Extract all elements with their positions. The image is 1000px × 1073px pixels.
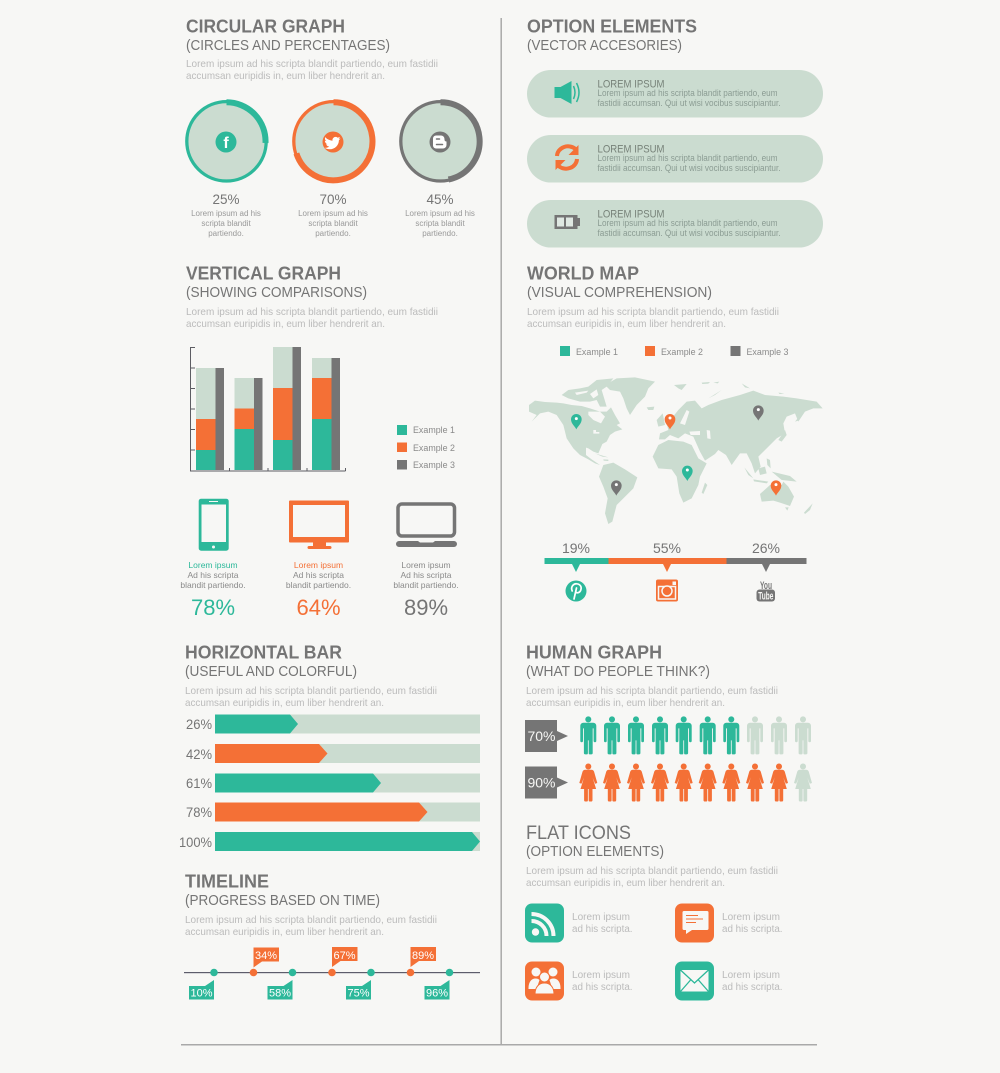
stat: laptop 89%: blandit partiendo. (393, 580, 459, 590)
split percentage bar: 19% (562, 540, 590, 556)
stat: phone 78%: blandit partiendo. (180, 580, 246, 590)
icon: laptop (396, 504, 457, 547)
icon: speaker (554, 81, 579, 104)
map legend (560, 346, 788, 358)
icon: youtube: You (760, 580, 772, 592)
heading: flat icons: accumsan euripidis in, eum liber hendrerit an. (526, 877, 725, 889)
pictogram row: men (580, 716, 811, 754)
pictogram row: women (579, 764, 812, 802)
circle gauge: 70% (294, 102, 373, 238)
text: chat (722, 912, 782, 935)
heading: world map (527, 262, 779, 330)
heading: timeline: (PROGRESS BASED ON TIME) (185, 893, 380, 909)
icon: youtube: Tube (758, 590, 773, 602)
heading: vertical graph: (SHOWING COMPARISONS) (186, 285, 367, 301)
circle gauge: 25% (187, 102, 266, 238)
text: group: Lorem ipsum (572, 970, 630, 981)
heading: flat icons (526, 822, 778, 889)
option pill: refresh: fastidii accumsan. Qui ut wisi vocibus suscipiantur. (598, 163, 780, 173)
option pill: battery: Lorem ipsum ad his scripta blandit partiendo, eum (598, 218, 778, 228)
text: rss (572, 912, 632, 935)
callout: 70% (525, 720, 568, 752)
circle gauge: 45%: 45% (426, 192, 454, 207)
circle gauge: 70%: 70% (319, 192, 347, 207)
stat: monitor 64%: Lorem ipsum (294, 560, 343, 570)
circle gauge: 45%: scripta blandit (415, 219, 465, 228)
icon: twitter (324, 137, 340, 149)
circle gauge: 45%: Lorem ipsum ad his (405, 209, 475, 218)
timeline events (189, 969, 453, 1000)
icon: rss (525, 904, 564, 942)
text: group (572, 970, 632, 993)
icon: battery (554, 215, 580, 229)
panel: human graph (525, 642, 812, 802)
map legend: Example 2 (661, 347, 703, 358)
bar: 26% (186, 714, 480, 734)
bar: 61% (186, 774, 480, 792)
heading: vertical graph: VERTICAL GRAPH (186, 262, 341, 284)
option pill: battery (527, 200, 823, 248)
circle gauge: 45%: partiendo. (422, 229, 458, 238)
text: rss: Lorem ipsum (572, 912, 630, 923)
callout: 90% (525, 766, 568, 798)
heading: world map: Lorem ipsum ad his scripta blandit partiendo, eum fastidii (527, 306, 779, 318)
circle gauge: 25%: partiendo. (208, 229, 244, 238)
text: envelope: Lorem ipsum (722, 970, 780, 981)
option pill: refresh: Lorem ipsum ad his scripta blandit partiendo, eum (598, 153, 778, 163)
stat: monitor 64%: 64% (296, 595, 341, 620)
heading: human graph (526, 642, 778, 709)
bar: 61%: 61% (186, 775, 212, 791)
option pill: sound: fastidii accumsan. Qui ut wisi vocibus suscipiantur. (598, 98, 780, 108)
split percentage bar: 55% (653, 540, 681, 556)
heading: flat icons: (OPTION ELEMENTS) (526, 844, 664, 860)
bar: 78% (186, 802, 480, 822)
option pill: sound: Lorem ipsum ad his scripta blandit partiendo, eum (598, 88, 778, 98)
option pill: battery: fastidii accumsan. Qui ut wisi vocibus suscipiantur. (598, 228, 780, 238)
heading: horizontal bar: (USEFUL AND COLORFUL) (185, 664, 357, 680)
callout: 70%: 70% (527, 728, 556, 744)
text: envelope (722, 970, 782, 993)
icon: instagram (656, 580, 678, 602)
map legend: Example 1 (576, 347, 618, 358)
stat: monitor 64%: Ad his scripta (293, 570, 344, 580)
stat: laptop 89%: Lorem ipsum (401, 560, 451, 570)
heading: world map: WORLD MAP (527, 262, 639, 284)
stat: phone 78%: Lorem ipsum (188, 560, 238, 570)
icon: envelope (675, 962, 714, 1000)
bar: 100%: 100% (179, 834, 212, 850)
stat: phone 78%: 78% (191, 595, 235, 620)
heading: human graph: Lorem ipsum ad his scripta blandit partiendo, eum fastidii (526, 685, 778, 697)
panel: circular graph (186, 16, 480, 238)
circle gauge: 25%: 25% (212, 192, 240, 207)
icon: refresh arrows (556, 145, 578, 170)
heading: timeline (185, 870, 437, 938)
heading: timeline: accumsan euripidis in, eum liber hendrerit an. (185, 926, 384, 938)
icon: chat bubble (675, 904, 714, 942)
heading: world map: accumsan euripidis in, eum liber hendrerit an. (527, 318, 726, 330)
panel: world map (527, 262, 823, 602)
split percentage bar (544, 540, 806, 572)
bar: 42%: 42% (186, 746, 212, 762)
heading: circular graph: Lorem ipsum ad his scripta blandit partiendo, eum fastidii (186, 58, 438, 70)
stat: laptop 89%: Ad his scripta (400, 570, 452, 580)
option pill: sound (527, 70, 823, 118)
heading: vertical graph: accumsan euripidis in, eum liber hendrerit an. (186, 318, 385, 330)
bar: 42% (186, 744, 480, 763)
stat: monitor 64%: blandit partiendo. (286, 580, 351, 590)
legend: Example 1 (413, 425, 455, 436)
option pill: refresh: LOREM IPSUM (598, 144, 665, 156)
bar: 26%: 26% (186, 716, 212, 732)
heading: timeline: Lorem ipsum ad his scripta blandit partiendo, eum fastidii (185, 914, 437, 926)
circle gauge: 70%: scripta blandit (308, 219, 358, 228)
timeline line: 75% (347, 988, 370, 1000)
stat: phone 78% (180, 499, 246, 620)
stacked bar chart (190, 347, 346, 471)
stat: laptop 89%: 89% (404, 595, 448, 620)
heading: world map: (VISUAL COMPREHENSION) (527, 285, 712, 301)
text: rss: ad his scripta. (572, 924, 632, 935)
circle gauge: 25%: Lorem ipsum ad his (191, 209, 261, 218)
heading: vertical graph (186, 262, 438, 330)
timeline line: 10% (190, 988, 213, 1000)
panel: flat icons (525, 822, 782, 1000)
option pill: sound: LOREM IPSUM (598, 78, 665, 90)
bar: 100% (179, 832, 480, 851)
stat: laptop 89% (393, 504, 459, 620)
heading: horizontal bar: HORIZONTAL BAR (185, 642, 342, 662)
heading: vertical graph: Lorem ipsum ad his scripta blandit partiendo, eum fastidii (186, 306, 438, 318)
icon: blogger (433, 136, 446, 148)
map: americas and greenland (529, 377, 655, 524)
heading: horizontal bar: Lorem ipsum ad his scripta blandit partiendo, eum fastidii (185, 685, 437, 697)
heading: flat icons: Lorem ipsum ad his scripta blandit partiendo, eum fastidii (526, 865, 778, 877)
callout: 90%: 90% (527, 774, 556, 790)
map legend: Example 3 (746, 347, 788, 358)
circle gauge: 70%: partiendo. (315, 229, 351, 238)
heading: circular graph (186, 16, 438, 82)
heading: option elements: OPTION ELEMENTS (527, 16, 697, 36)
circle gauge: 70%: Lorem ipsum ad his (298, 209, 368, 218)
split percentage bar: 26% (752, 540, 780, 556)
panel: horizontal bar (179, 642, 480, 851)
heading: circular graph: accumsan euripidis in, eum liber hendrerit an. (186, 70, 385, 82)
timeline line: 96% (426, 988, 448, 1000)
timeline line: 34% (255, 950, 277, 962)
circle gauge: 25%: scripta blandit (201, 219, 251, 228)
column divider (181, 18, 817, 1045)
option pill: refresh (527, 135, 823, 182)
icon: youtube (756, 580, 775, 602)
stat: monitor 64% (286, 500, 351, 620)
icon: group of people (525, 962, 564, 1000)
timeline line: 67% (333, 950, 356, 962)
circle gauge: 45% (401, 102, 480, 238)
heading: option elements (527, 16, 697, 54)
map pins (571, 405, 781, 496)
heading: horizontal bar: accumsan euripidis in, eum liber hendrerit an. (185, 697, 384, 709)
heading: human graph: accumsan euripidis in, eum liber hendrerit an. (526, 697, 725, 709)
text: chat: ad his scripta. (722, 924, 782, 935)
icon: pinterest (566, 580, 586, 602)
timeline line (184, 947, 480, 1000)
heading: circular graph: CIRCULAR GRAPH (186, 16, 345, 36)
timeline line: 58% (269, 988, 291, 1000)
legend: Example 2 (413, 443, 455, 454)
panel: timeline (184, 870, 480, 1000)
option pill: battery: LOREM IPSUM (598, 208, 665, 220)
icon: phone (199, 499, 229, 551)
legend (397, 425, 455, 471)
map: eurasia, africa and oceania (653, 382, 823, 514)
text: chat: Lorem ipsum (722, 912, 780, 923)
text: envelope: ad his scripta. (722, 982, 782, 993)
panel: vertical graph (180, 262, 459, 620)
timeline line: 89% (412, 950, 434, 962)
icon: monitor (289, 500, 349, 549)
heading: human graph: (WHAT DO PEOPLE THINK?) (526, 664, 710, 680)
stat: phone 78%: Ad his scripta (187, 570, 239, 580)
heading: flat icons: FLAT ICONS (526, 822, 631, 844)
heading: horizontal bar (185, 642, 437, 709)
world map (529, 377, 823, 524)
text: group: ad his scripta. (572, 982, 632, 993)
heading: human graph: HUMAN GRAPH (526, 642, 662, 662)
legend: Example 3 (413, 460, 455, 471)
heading: circular graph: (CIRCLES AND PERCENTAGES) (186, 38, 390, 54)
heading: timeline: TIMELINE (185, 870, 269, 892)
bar: 78%: 78% (186, 804, 212, 820)
panel: option elements (527, 16, 823, 248)
heading: option elements: (VECTOR ACCESORIES) (527, 38, 682, 54)
icon: facebook: f (223, 135, 229, 152)
